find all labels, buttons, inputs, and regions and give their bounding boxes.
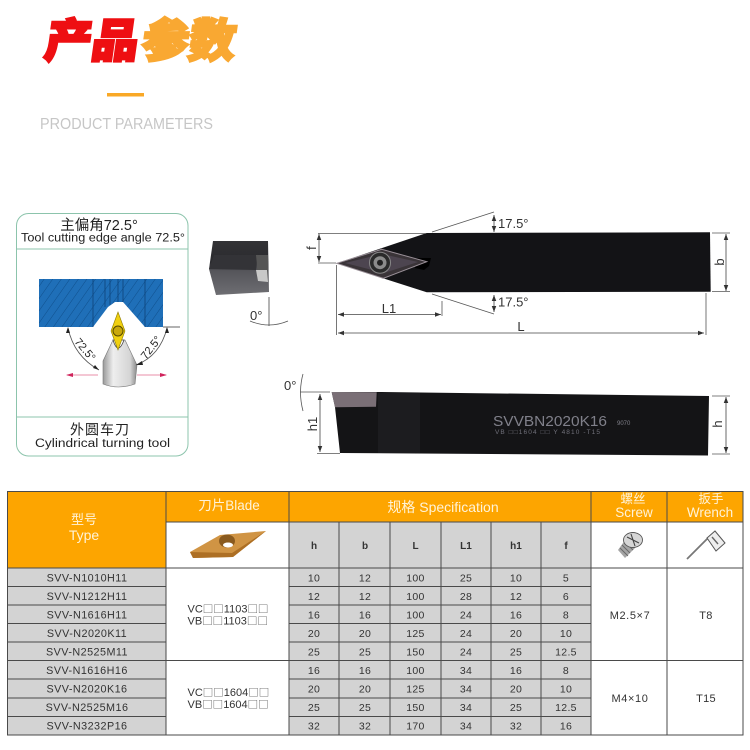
table body: specification values: 12.5: [555, 702, 577, 714]
table body: specification values: 34: [460, 665, 472, 677]
table body: screw and wrench values: M2.5×7: [610, 610, 650, 622]
carbide insert: [337, 249, 427, 278]
table body: specification values: 12: [510, 591, 522, 603]
table header: Screw: [615, 505, 653, 520]
table body: specification values: 28: [460, 591, 472, 603]
table body: screw and wrench values: [610, 610, 716, 705]
table body: specification values: 25: [308, 646, 320, 658]
table body: specification values: 6: [563, 591, 569, 603]
panel heading: [21, 217, 185, 244]
dimensions: top view: [304, 212, 730, 335]
table body: blade codes: VC□□1103□□: [188, 602, 268, 616]
title: 参数: [139, 16, 240, 67]
table body: specification values: 25: [308, 702, 320, 714]
dimensions: top view: f: [304, 246, 319, 250]
table body: specification values: 5: [563, 572, 569, 584]
title accent bar: [107, 93, 144, 96]
table body: model column: SVV-N1010H11: [47, 572, 127, 584]
table body: specification values: [308, 572, 577, 732]
table body: specification values: 100: [406, 572, 425, 584]
table header: h: [311, 541, 317, 552]
table body: specification values: 16: [510, 665, 522, 677]
table header: L: [412, 541, 419, 552]
table body: specification values: 34: [460, 720, 472, 732]
table body: specification values: 24: [460, 610, 472, 622]
table body: specification values: 100: [406, 591, 425, 603]
table body: specification values: 100: [406, 665, 425, 677]
table body: specification values: 24: [460, 646, 472, 658]
table body: model column: SVV-N1212H11: [47, 591, 127, 603]
panel caption: [35, 422, 170, 450]
table header: f: [564, 541, 568, 552]
diagram: workpiece and tool: 72.5°: [139, 334, 164, 362]
table body: model column: SVV-N2525M11: [46, 646, 128, 658]
table body: specification values: 16: [308, 610, 320, 622]
table body: specification values: 25: [510, 646, 522, 658]
table body: specification values: 10: [560, 684, 572, 696]
table body: screw and wrench values: T15: [696, 693, 716, 705]
table body: model column: SVV-N1616H11: [47, 610, 127, 622]
dimensions: top view: L1: [382, 301, 396, 316]
table header: 螺丝: [620, 492, 646, 506]
table body: screw and wrench values: T8: [699, 610, 713, 622]
table body: specification values: 25: [359, 702, 371, 714]
table body: specification values: 32: [308, 720, 320, 732]
dimensions: side view: h1: [305, 417, 320, 431]
table header: Type: [69, 527, 99, 543]
table body: specification values: 20: [510, 684, 522, 696]
table body: specification values: 34: [460, 684, 472, 696]
table body: specification values: 100: [406, 610, 425, 622]
insert end view: 0°: [250, 308, 262, 323]
diagram: workpiece and tool: 72.5°: [72, 336, 97, 364]
table body: specification values: 10: [308, 572, 320, 584]
table body: specification values: 125: [406, 684, 425, 696]
table body: model column: SVV-N2525M16: [46, 702, 128, 714]
table body: model column: SVV-N3232P16: [46, 720, 128, 732]
table body: specification values: 10: [510, 572, 522, 584]
table body: specification values: 20: [510, 628, 522, 640]
table body: specification values: 16: [359, 610, 371, 622]
panel caption: Cylindrical turning tool: [35, 438, 170, 450]
table body: specification values: 25: [460, 572, 472, 584]
dimensions: top view: b: [712, 258, 727, 266]
table body: specification values: 16: [510, 610, 522, 622]
table body: model column: SVV-N2020K16: [46, 684, 128, 696]
icon: wrench: [687, 531, 725, 559]
specification table: [7, 491, 743, 735]
icon: screw: [618, 532, 642, 558]
dimensions: top view: 17.5°: [498, 294, 529, 310]
table header: 规格 Specification: [387, 499, 499, 515]
table body: specification values: 32: [359, 720, 371, 732]
tool side view: [332, 392, 709, 456]
subtitle: PRODUCT PARAMETERS: [40, 116, 213, 133]
table body: blade codes: VC□□1604□□: [188, 685, 269, 700]
table header: h1: [510, 541, 522, 552]
dimensions: top view: 17.5°: [498, 216, 529, 231]
icon: blade insert: [190, 531, 266, 558]
tool side view: VB □□1604 □□ Y 4810 -T15: [495, 429, 600, 436]
table body: specification values: 8: [563, 610, 569, 622]
title: [42, 16, 240, 67]
table body: specification values: 32: [510, 720, 522, 732]
table body: specification values: 20: [359, 684, 371, 696]
table body: specification values: 170: [406, 720, 425, 732]
table body: specification values: 150: [406, 702, 425, 714]
table body: specification values: 10: [560, 628, 572, 640]
table body: specification values: 20: [308, 684, 320, 696]
table header: b: [362, 541, 368, 552]
title: 产品: [42, 16, 143, 67]
table body: screw and wrench values: M4×10: [612, 693, 648, 705]
table body: specification values: 24: [460, 628, 472, 640]
table body: specification values: 25: [359, 646, 371, 658]
table body: model column: SVV-N2020K11: [47, 628, 127, 640]
table body: specification values: 34: [460, 702, 472, 714]
panel caption: 外圆车刀: [70, 422, 130, 438]
table body: specification values: 8: [563, 665, 569, 677]
table body: specification values: 25: [510, 702, 522, 714]
dimensions: top view: L: [517, 319, 525, 334]
dimensions: side view: h: [710, 420, 725, 428]
table body: model column: [7, 568, 591, 735]
table body: specification values: 12: [308, 591, 320, 603]
panel heading: 主偏角72.5°: [60, 217, 138, 234]
table body: blade codes: VB□□1103□□: [188, 614, 268, 628]
table body: specification values: 12: [359, 591, 371, 603]
insert end view: [209, 241, 288, 326]
table body: blade codes: VB□□1604□□: [188, 697, 269, 712]
engraved model: SVVBN2020K16: [493, 414, 607, 430]
dimensions: side view: [284, 374, 730, 454]
table body: specification values: 16: [308, 665, 320, 677]
table body: specification values: 12.5: [555, 646, 577, 658]
table body: specification values: 150: [406, 646, 425, 658]
table body: specification values: 20: [359, 628, 371, 640]
diagram: workpiece and tool: [39, 279, 180, 387]
dimensions: side view: 0°: [284, 378, 296, 393]
table header: [7, 491, 743, 568]
table body: model column: SVV-N1616H16: [46, 665, 128, 677]
table header: 扳手: [698, 492, 724, 506]
panel: cutting edge angle: [16, 214, 188, 456]
table grid lines: [7, 492, 743, 735]
table body: blade codes: [188, 602, 269, 712]
table header: 型号: [71, 512, 97, 527]
table body: specification values: 16: [560, 720, 572, 732]
table body: specification values: 12: [359, 572, 371, 584]
table header: L1: [460, 541, 472, 552]
tool top view: [337, 232, 711, 292]
table header: Wrench: [687, 505, 733, 520]
table body: specification values: 16: [359, 665, 371, 677]
table body: specification values: 125: [406, 628, 425, 640]
table body: specification values: 20: [308, 628, 320, 640]
table header: 刀片Blade: [198, 498, 260, 513]
tool side view: 9070: [617, 421, 631, 427]
panel heading: Tool cutting edge angle 72.5°: [21, 232, 185, 244]
